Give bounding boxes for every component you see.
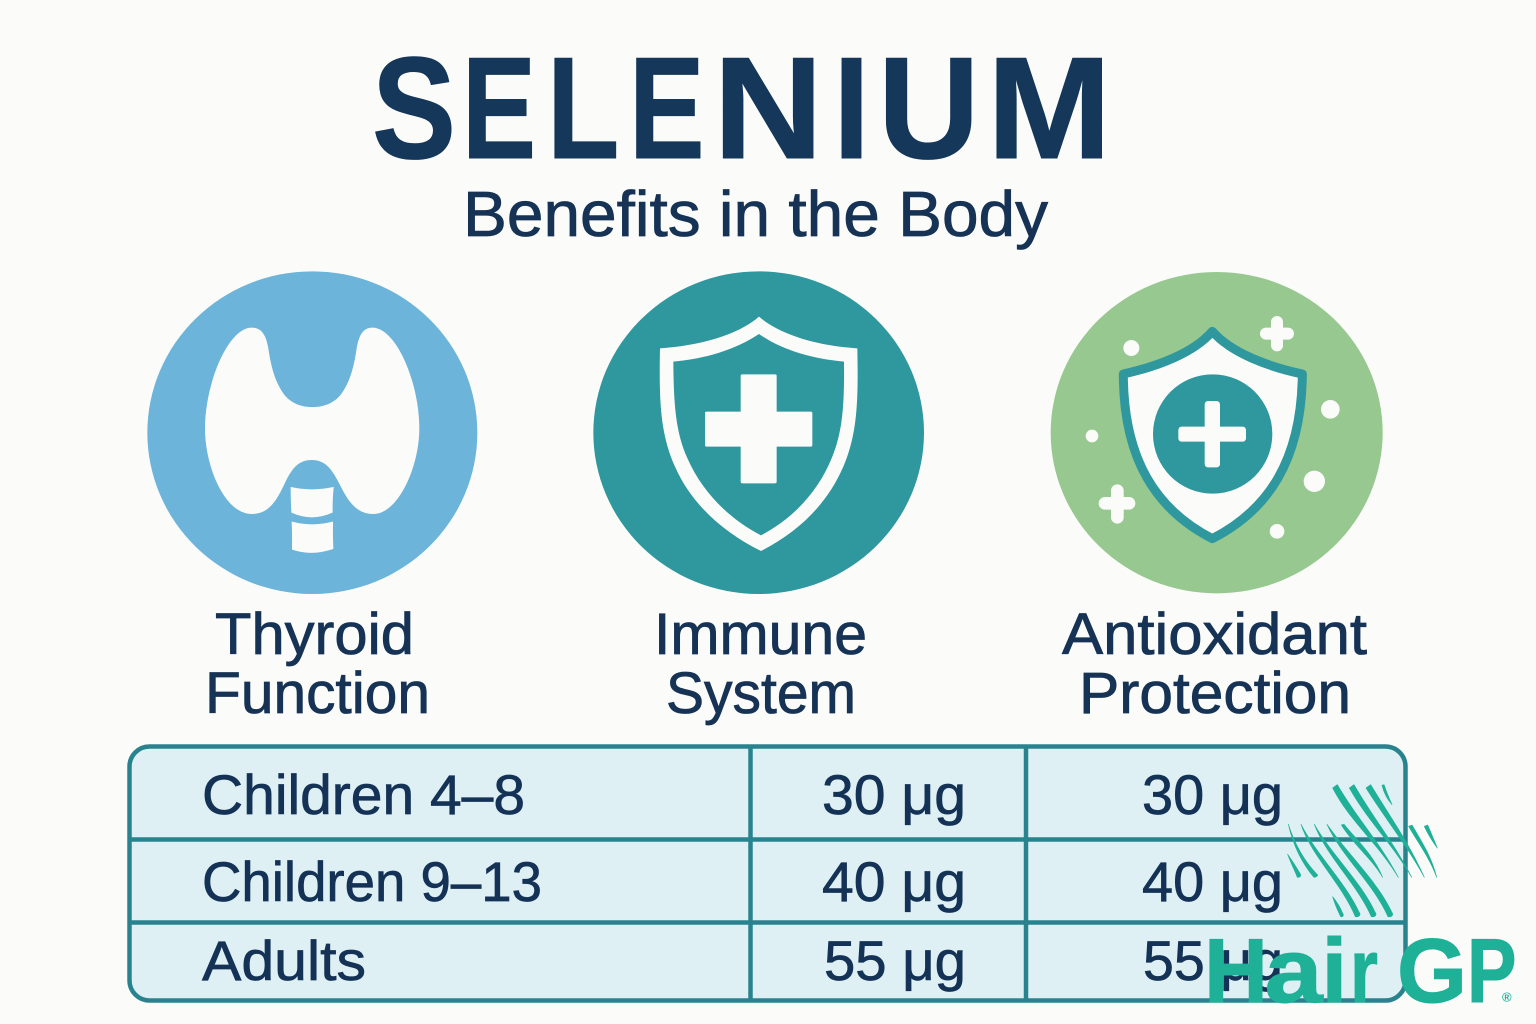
label: immune system: Immune [654, 602, 867, 667]
logo: Hair GP [1204, 785, 1516, 1022]
title: M [987, 27, 1112, 189]
title: E [462, 27, 536, 189]
icon: shield with cross [593, 271, 924, 594]
wordmark: H [1204, 921, 1268, 1022]
icon: shield with sparkles [1051, 272, 1383, 593]
wordmark: GP: G [1397, 921, 1467, 1022]
wordmark: GP: P [1467, 921, 1516, 1022]
row: children 9-13 [202, 850, 1283, 913]
row: children 4-8: Children 4–8 [202, 763, 525, 826]
title: S [372, 27, 456, 189]
panel: thyroid function [147, 271, 477, 726]
label: thyroid function [205, 602, 430, 726]
label: thyroid function: Function [205, 661, 430, 726]
title: U [878, 27, 980, 189]
registered mark: ® [1502, 990, 1512, 1004]
row: children 9-13: 40 μg [822, 850, 966, 913]
row: adults [202, 929, 1283, 992]
row: children 4-8: 30 μg [1142, 763, 1283, 826]
row: children 9-13: Children 9–13 [202, 850, 542, 913]
row: adults: Adults [202, 929, 366, 992]
wordmark: r [1350, 921, 1378, 1022]
icon: hair strands [1288, 785, 1437, 917]
title: E [629, 27, 704, 189]
row: children 4-8: 30 μg [822, 763, 966, 826]
title: I [833, 27, 870, 189]
label: antioxidant protection [1062, 602, 1367, 726]
icon: thyroid [147, 271, 477, 594]
row: children 4-8 [202, 763, 1283, 826]
label: immune system [654, 602, 867, 726]
row: children 9-13: 40 μg [1142, 850, 1283, 913]
title: N [713, 27, 823, 189]
subtitle: Benefits in the Body [463, 178, 1048, 250]
label: immune system: System [666, 661, 856, 726]
label: antioxidant protection: Protection [1079, 661, 1351, 726]
title: L [547, 27, 619, 189]
table: recommended selenium intake [130, 746, 1406, 1000]
label: thyroid function: Thyroid [215, 602, 414, 667]
wordmark: i [1321, 921, 1347, 1022]
row: adults: 55 μg [824, 929, 966, 992]
panel: antioxidant protection [1051, 272, 1383, 726]
panel: immune system [593, 271, 924, 726]
wordmark: a [1264, 921, 1324, 1022]
label: antioxidant protection: Antioxidant [1062, 602, 1367, 667]
row: adults: 55 μg [1143, 929, 1283, 992]
